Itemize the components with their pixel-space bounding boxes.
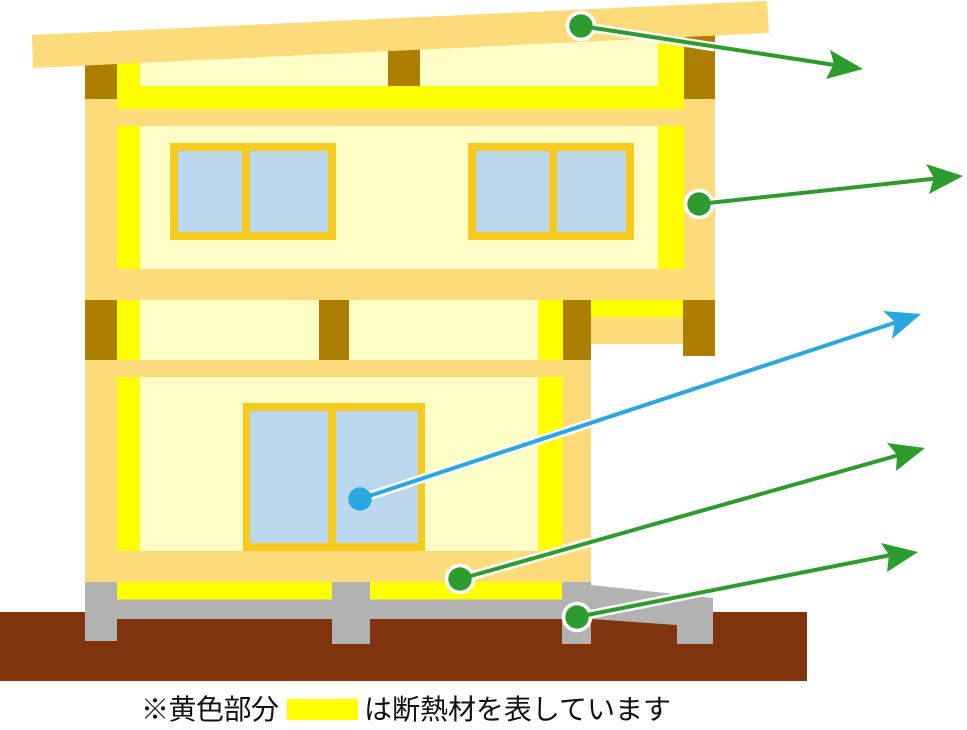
between-floors structure xyxy=(85,300,715,360)
upper floor interior xyxy=(140,126,658,269)
floor insulation xyxy=(117,582,562,600)
ground floor walls xyxy=(85,360,591,582)
arrow: window heat loss xyxy=(348,311,921,511)
ceiling insulation xyxy=(117,40,684,109)
arrow: floor heat loss xyxy=(445,443,925,594)
arrow: foundation heat loss xyxy=(562,543,918,632)
roof xyxy=(32,1,769,68)
legend swatch xyxy=(287,699,358,720)
attic space xyxy=(85,30,715,109)
arrow: roof heat loss xyxy=(566,11,863,79)
legend text: yellow part: ※黄色部分 xyxy=(141,694,279,725)
legend xyxy=(141,694,671,725)
upper floor walls xyxy=(85,99,715,300)
legend text: is insulation: は断熱材を表しています xyxy=(364,694,671,725)
ground xyxy=(0,612,807,681)
upper floor wall insulation xyxy=(117,126,684,269)
upper floor window left xyxy=(170,143,336,240)
arrow: wall heat loss xyxy=(684,164,963,219)
attic beams xyxy=(85,30,715,99)
ground floor interior xyxy=(140,377,538,551)
ground floor wall insulation xyxy=(117,377,563,551)
ground floor window xyxy=(243,403,425,551)
upper floor window right xyxy=(468,143,634,240)
concrete foundation xyxy=(85,582,713,644)
